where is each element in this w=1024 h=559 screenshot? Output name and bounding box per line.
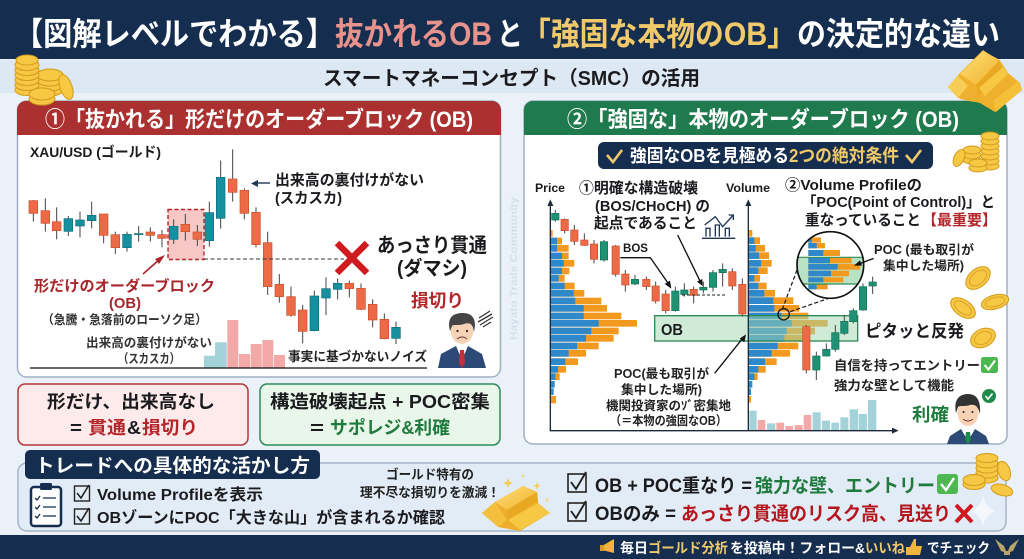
order block label [34, 277, 215, 327]
BOS label: BOS [623, 241, 648, 255]
footer bar: 毎日 [620, 540, 648, 556]
condition 1 text: ①明確な構造破壊 [579, 179, 698, 197]
entry notes: 強力な壁として機能 [834, 378, 954, 393]
absolute conditions banner [598, 142, 933, 169]
absolute conditions banner: 強固なOBを見極める [630, 146, 789, 166]
title banner: 「強固な本物のOB」 [522, 16, 796, 52]
candles [552, 210, 876, 380]
title banner: 【図解レベルでわかる】 [14, 16, 335, 52]
summary box: real OB [260, 384, 500, 445]
summary box: fake OB: = [70, 418, 82, 438]
small POC circle with leader lines [778, 270, 829, 320]
bounce label: ピタッと反発 [865, 322, 964, 341]
note: no volume lower: （スカスカ） [118, 352, 180, 366]
title banner [0, 0, 1024, 59]
order block highlight zone [168, 210, 204, 260]
right panel header [524, 101, 1007, 135]
POC callout lower [606, 366, 731, 428]
checklist left: Volume Profileを表示 [97, 486, 263, 504]
summary box: real OB: サポレジ&利確 [330, 417, 450, 438]
condition 1 text [579, 179, 710, 232]
right panel header: ②「強固な」本物のオーダーブロック (OB) [567, 107, 959, 132]
checklist right line 1: OB + POC重なり = [595, 475, 752, 497]
left volume profile bars [550, 230, 637, 403]
summary box: real OB: 構造破壊起点 + POC密集 [270, 392, 490, 412]
gold note: ゴールド特有の [386, 467, 474, 482]
structure break level [682, 293, 725, 296]
POC callout lower: 集中した場所) [621, 382, 702, 397]
arrow to no volume note [251, 180, 270, 187]
note: easy breakthrough [377, 234, 487, 280]
condition 2 text: 「POC(Point of Control)」と [802, 194, 995, 211]
condition 1 text: 起点であること [594, 214, 697, 232]
footer bar: いいね [865, 540, 905, 556]
condition 2 text [785, 177, 997, 229]
arrow: BOS [620, 258, 671, 289]
checklist right line 2 [568, 501, 972, 525]
section tag: トレードへの具体的な活かし方 [35, 454, 310, 477]
summary box: fake OB: & [127, 418, 141, 438]
POC callout upper: POC (最も取引が [874, 242, 975, 257]
OB zone rectangle [655, 316, 858, 341]
POC callout upper [874, 242, 975, 273]
absolute conditions banner: 2つの絶対条件 [789, 146, 899, 166]
red cross mark [337, 243, 367, 273]
arrow: origin [678, 235, 703, 286]
note: no volume lower [86, 335, 212, 366]
instrument label: XAU/USD (ゴールド) [30, 144, 161, 160]
magnifier on point of control [797, 232, 864, 298]
summary box: real OB: = [310, 418, 324, 438]
checklist right line 1 [568, 472, 958, 497]
decoration: sparkle [970, 495, 996, 527]
icon: gold bars center [482, 474, 550, 531]
icon: green check circle [982, 389, 996, 403]
panel: how to use in trading [18, 450, 1006, 531]
POC callout lower: 機関投資家のｿﾞ密集地 [606, 398, 731, 413]
axis label: price: Price [535, 181, 565, 195]
footer bar: を投稿中！フォロー& [730, 540, 865, 556]
dashed breach line [204, 258, 344, 260]
note: no volume upper: 出来高の裏付けがない [275, 171, 424, 189]
note: no volume upper: (スカスカ) [275, 190, 342, 207]
chart baseline [30, 367, 427, 369]
condition 2 text: 【最重要】 [922, 211, 997, 229]
note: easy breakthrough: (ダマシ) [397, 256, 467, 280]
panel: left fake order block [17, 101, 501, 377]
icon: thumbs up [906, 539, 922, 555]
title banner: と [497, 16, 523, 52]
title banner: の決定的な違い [797, 16, 1000, 52]
footer bar: ゴールド分析 [648, 540, 728, 556]
gold note [360, 467, 500, 500]
order block label: （急騰・急落前のローソク足） [42, 312, 207, 327]
decoration: coin stack top left [15, 55, 76, 105]
icon: confident trader [947, 394, 989, 444]
volume bars [204, 320, 285, 368]
note: no volume upper [275, 171, 424, 207]
volume profile chart [547, 199, 899, 434]
noise note: 事実に基づかないノイズ [288, 349, 427, 364]
OB label: OB [661, 322, 683, 339]
panel: right real order block [524, 101, 1007, 444]
summary box: fake OB: 損切り [142, 418, 198, 438]
note: easy breakthrough: あっさり貫通 [377, 234, 487, 257]
left panel header [17, 101, 501, 135]
icon: mini chart [702, 215, 735, 238]
decoration: coin stack bottom right [963, 454, 1014, 498]
subtitle band: スマートマネーコンセプト（SMC）の活用 [323, 67, 700, 90]
bottom volume bars [749, 400, 876, 430]
gold note: 理不尽な損切りを激減！ [360, 485, 500, 500]
checklist right line 2: あっさり貫通のリスク高、見送り [681, 503, 951, 525]
profit label: 利確 [912, 405, 949, 425]
decoration: coins upper right [951, 132, 999, 172]
POC callout lower: （＝本物の強固なOB） [610, 413, 727, 428]
checklist right line 1: 強力な壁、エントリー [755, 475, 935, 497]
entry notes: 自信を持ってエントリー [834, 358, 980, 373]
decoration: flying coins [947, 262, 1010, 352]
icon: megaphone [600, 539, 614, 553]
summary box: fake OB [18, 384, 248, 445]
watermark: Hayato Trade Community [509, 196, 520, 340]
entry notes [834, 358, 980, 393]
order block label: (OB) [109, 295, 141, 312]
icon: green check box [981, 357, 998, 373]
note: no volume lower: 出来高の裏付けがない [86, 335, 212, 350]
decoration: gold bars top right [948, 50, 1022, 112]
stop loss label: 損切り [411, 291, 464, 311]
arrow to order block [143, 255, 165, 274]
checklist left [74, 485, 445, 527]
title banner: 抜かれるOB [335, 16, 492, 52]
arrow: POC note to OB [715, 334, 746, 373]
checklist left: OBゾーンにPOC「大きな山」が含まれるか確認 [97, 508, 445, 527]
chart axes [547, 199, 899, 434]
footer bar: でチェック [927, 540, 990, 556]
footer bar [0, 535, 1024, 559]
POC callout upper: 集中した場所) [883, 258, 964, 273]
right volume profile bars [748, 230, 828, 403]
POC callout lower: POC(最も取引が [614, 366, 709, 381]
section tag [25, 450, 320, 479]
subtitle band [0, 60, 1024, 93]
left panel header: ①「抜かれる」形だけのオーダーブロック (OB) [45, 107, 473, 132]
icon: clipboard [31, 483, 61, 526]
summary box: fake OB: 形だけ、出来高なし [47, 392, 215, 412]
candlestick chart [29, 149, 400, 344]
order block label: 形だけのオーダーブロック [34, 277, 215, 295]
icon: logo [995, 539, 1019, 555]
checklist right line 2: OBのみ = [595, 504, 676, 525]
arrow: magnified POC [854, 258, 874, 266]
condition 2 text: ②Volume Profileの [785, 177, 922, 194]
condition 2 text: 重なっていること [805, 211, 921, 229]
condition 1 text: (BOS/CHoCH) の [595, 198, 710, 215]
summary box: fake OB: 貫通 [88, 418, 126, 438]
axis label: volume: Volume [726, 181, 770, 195]
icon: worried trader [438, 311, 493, 368]
